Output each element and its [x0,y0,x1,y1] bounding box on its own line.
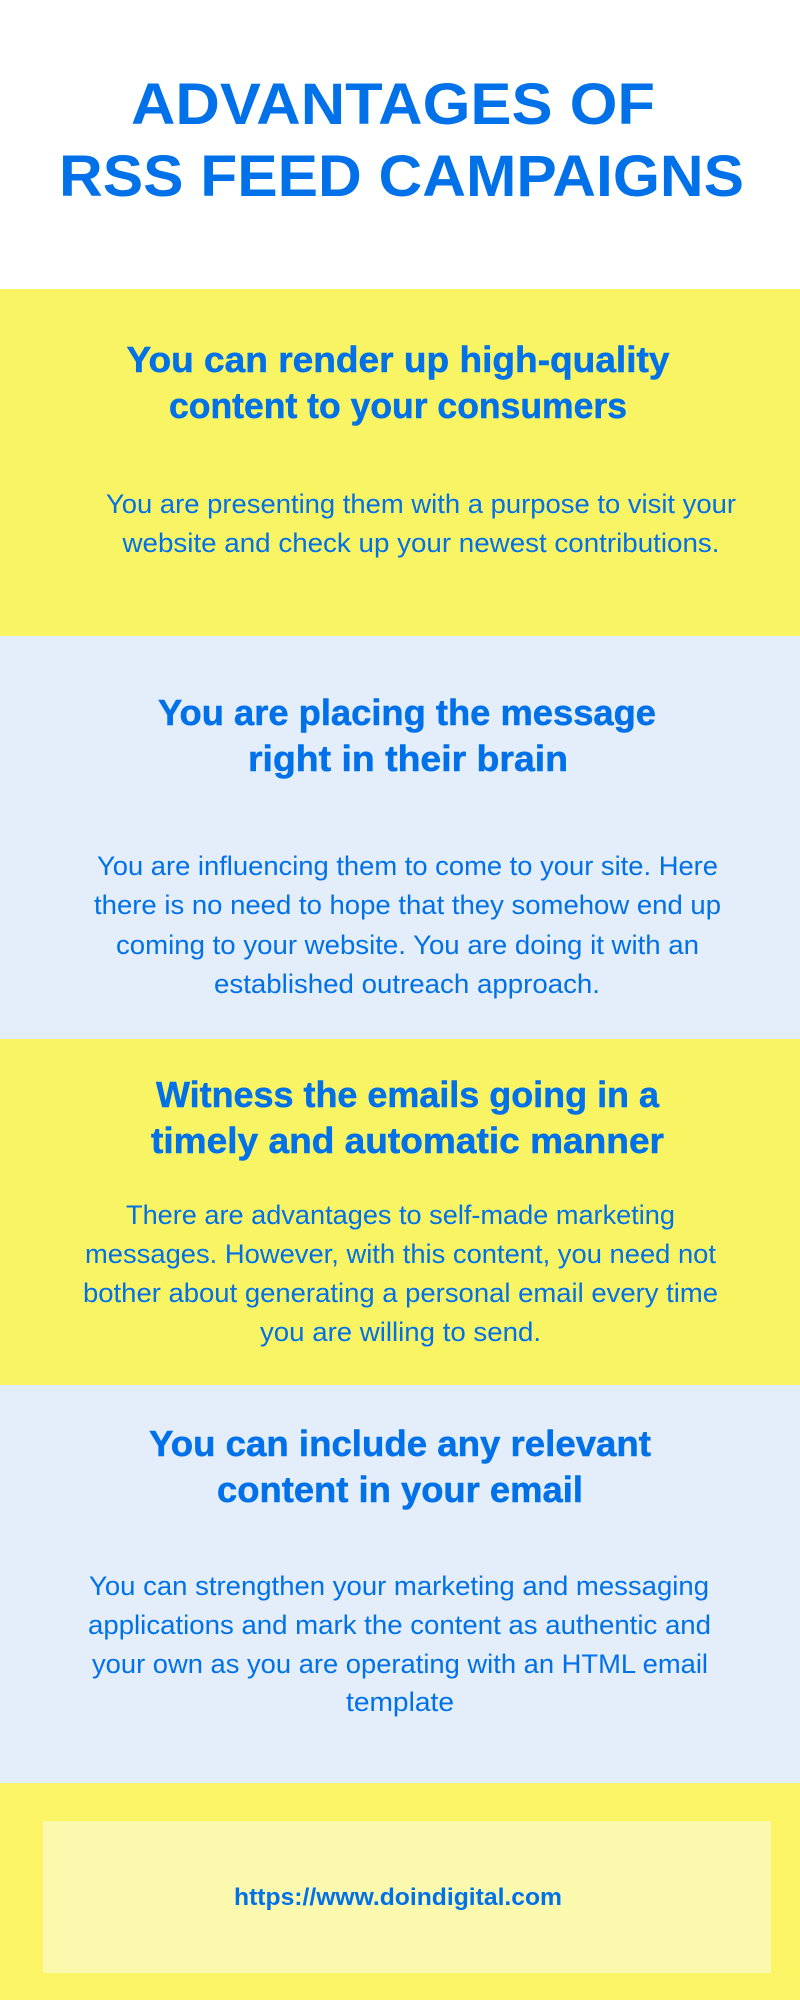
panel: message in their brain [0,636,800,1039]
text block: relevant content: applications and mark the content as authentic and [88,1610,711,1640]
heading: message in their brain: You are placing the message [158,692,656,733]
heading: message in their brain [158,692,656,779]
text block: relevant content [88,1571,711,1717]
heading: message in their brain: right in their brain [248,738,568,779]
heading: high-quality content: You can render up high-quality [126,339,670,380]
heading: high-quality content [126,339,670,426]
panel: footer [0,1783,800,2000]
text block: relevant content: template [346,1687,454,1717]
heading: timely and automatic emails: timely and automatic manner [151,1120,664,1161]
footer link box [43,1821,771,1973]
title [59,72,744,209]
footer link box: https://www.doindigital.com [234,1884,562,1911]
heading: timely and automatic emails: Witness the emails going in a [156,1074,660,1115]
heading: relevant content: You can include any relevant [149,1423,651,1464]
text block: high-quality content: You are presenting them with a purpose to visit your [106,489,736,519]
text block: message in their brain [94,851,721,999]
panel: relevant content [0,1385,800,1783]
title: RSS FEED CAMPAIGNS [59,144,744,209]
text block: high-quality content: website and check up your newest contributions. [121,528,720,558]
text block: message in their brain: established outreach approach. [214,969,600,999]
heading: timely and automatic emails [151,1074,664,1161]
text block: high-quality content [106,489,736,558]
text block: message in their brain: coming to your website. You are doing it with an [116,930,699,960]
text block: timely and automatic emails: messages. However, with this content, you need not [85,1239,716,1269]
heading: relevant content [149,1423,651,1510]
title: ADVANTAGES OF [131,72,655,137]
text block: relevant content: You can strengthen your marketing and messaging [89,1571,709,1601]
text block: timely and automatic emails [83,1200,718,1347]
panel: timely and automatic emails [0,1039,800,1385]
text block: message in their brain: there is no need to hope that they somehow end up [94,890,721,920]
text block: timely and automatic emails: There are advantages to self-made marketing [126,1200,675,1230]
text block: timely and automatic emails: bother about generating a personal email every time [83,1278,718,1308]
heading: relevant content: content in your email [217,1469,583,1510]
text block: message in their brain: You are influencing them to come to your site. Here [97,851,718,881]
text block: relevant content: your own as you are operating with an HTML email [92,1649,708,1679]
text block: timely and automatic emails: you are willing to send. [260,1317,541,1347]
heading: high-quality content: content to your consumers [169,385,627,426]
panel: high-quality content [0,289,800,636]
